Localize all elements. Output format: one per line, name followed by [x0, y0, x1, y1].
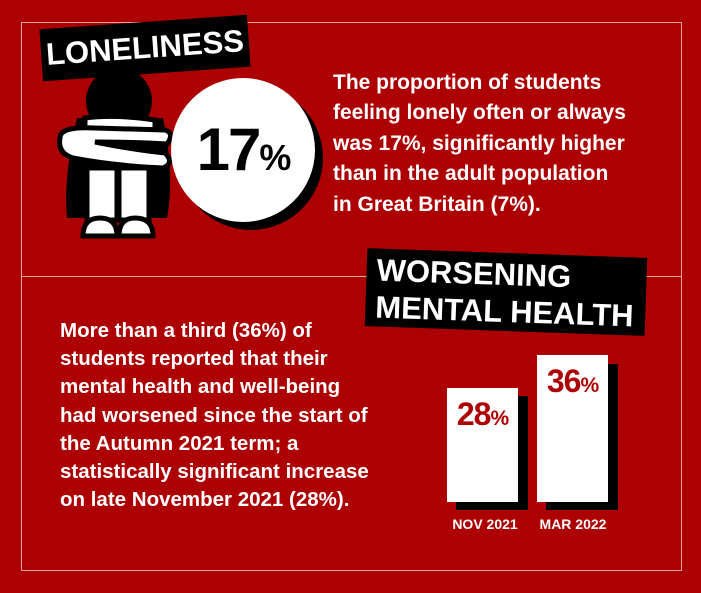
bar chart — [447, 355, 618, 532]
text: mental health description — [60, 319, 369, 511]
text: loneliness description: feeling lonely often or always — [333, 101, 626, 124]
bar chart: 28% — [457, 396, 508, 432]
bar chart: MAR 2022 — [540, 516, 606, 532]
label: WORSENING MENTAL HEALTH: WORSENING — [376, 252, 572, 294]
label: LONELINESS — [39, 15, 251, 81]
label: WORSENING MENTAL HEALTH: MENTAL HEALTH — [375, 289, 634, 333]
label: LONELINESS: LONELINESS — [45, 23, 245, 72]
divider — [21, 276, 681, 277]
text: mental health description: mental health and well-being — [60, 375, 340, 398]
text: mental health description: the Autumn 2021 term; a — [60, 432, 298, 455]
text: loneliness description: was 17%, significantly higher — [333, 132, 625, 155]
bar: Mar 2022 — [546, 364, 618, 510]
text: mental health description: on late November 2021 (28%). — [60, 488, 349, 511]
text: mental health description: students reported that their — [60, 347, 328, 370]
text: loneliness description: in Great Britain (7%). — [333, 193, 541, 216]
stat circle: 17% — [171, 78, 323, 230]
text: mental health description: had worsened since the start of — [60, 404, 368, 427]
text: mental health description: More than a third (36%) of — [60, 319, 312, 342]
text: loneliness description: than in the adult population — [333, 162, 608, 185]
text: loneliness description — [332, 71, 626, 216]
stat circle: 17%: 17% — [197, 116, 289, 183]
axis labels: NOV 2021 — [452, 516, 518, 532]
bar: Nov 2021 — [456, 396, 528, 510]
label: WORSENING MENTAL HEALTH — [365, 248, 647, 336]
bar chart: 36% — [547, 363, 598, 399]
text: mental health description: statistically significant increase — [60, 460, 369, 483]
icon: lonely figure — [57, 74, 173, 238]
text: loneliness description: The proportion of students — [333, 71, 601, 94]
